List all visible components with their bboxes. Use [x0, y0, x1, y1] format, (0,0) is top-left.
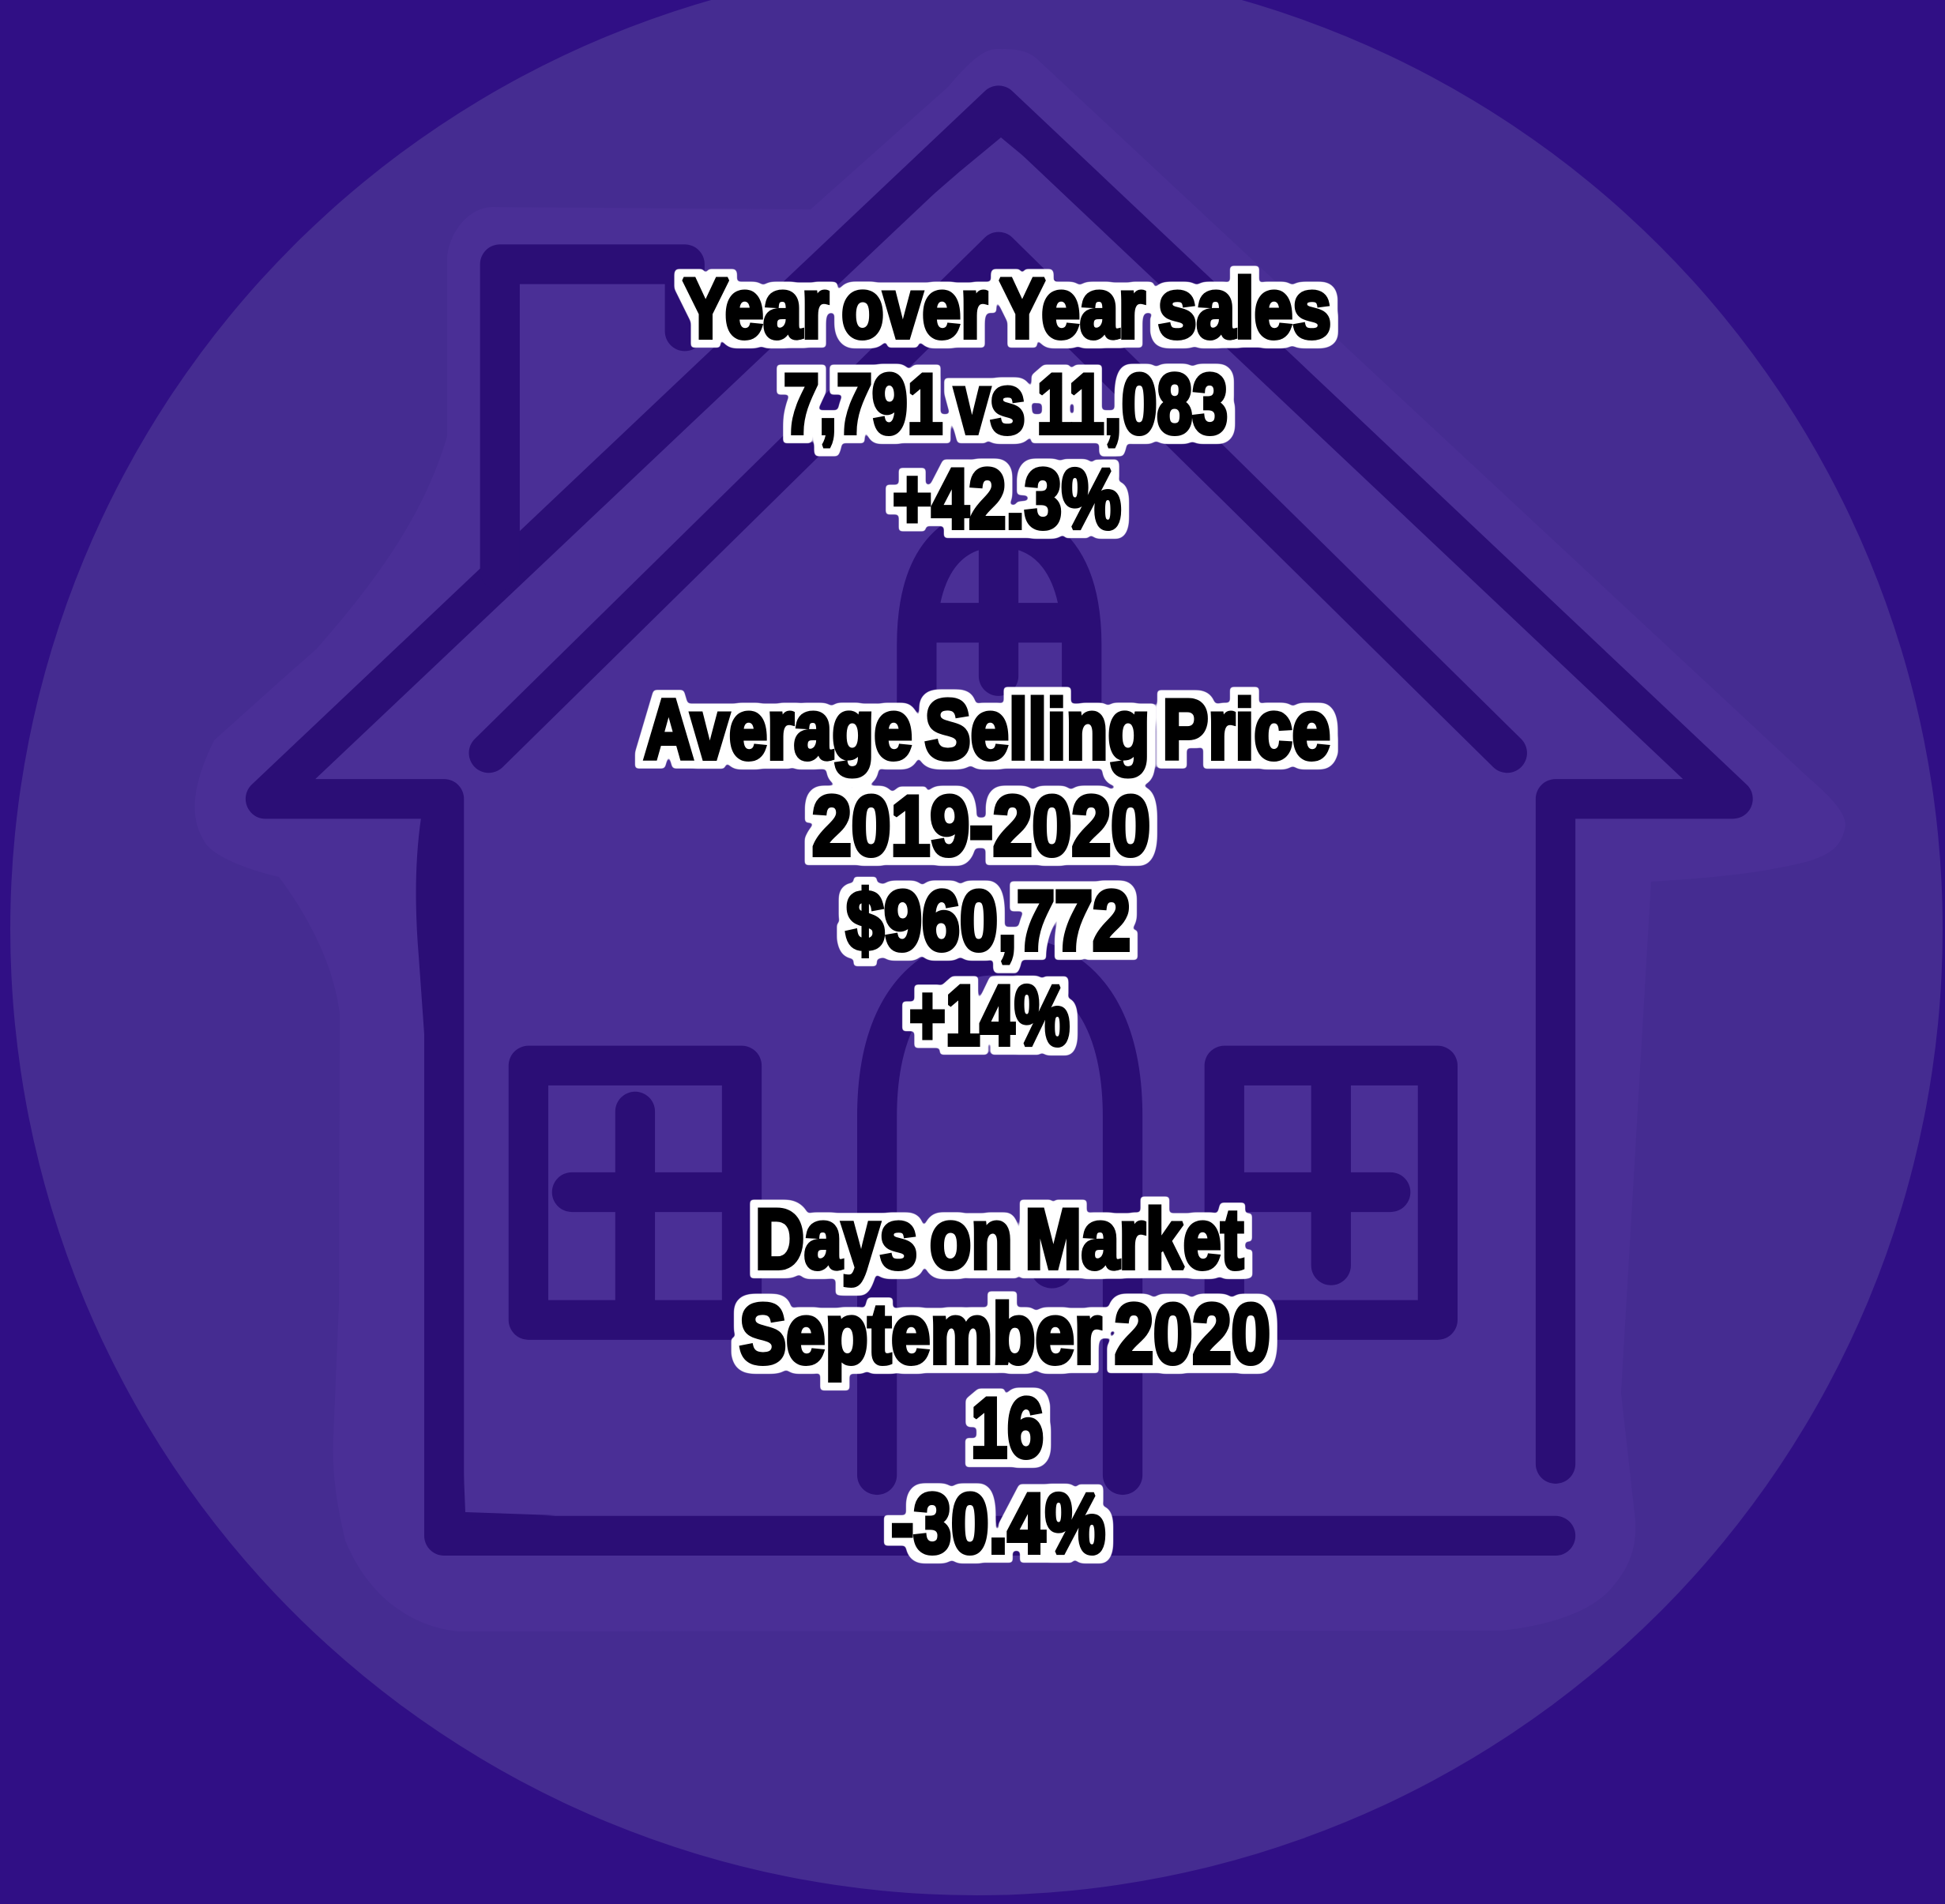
heading: Days on Market: [755, 1191, 1243, 1286]
attic window: [916, 527, 1082, 720]
right window: [1225, 1066, 1438, 1320]
days change: -30.4%: [891, 1476, 1105, 1571]
house icon: [265, 105, 1733, 1536]
left window: [529, 1066, 742, 1320]
wall and roof irregular edges: [416, 131, 1047, 1521]
heading: Year over Year sales: [683, 261, 1331, 356]
price change: +14%: [909, 968, 1070, 1063]
heading: Average Selling Price: [644, 682, 1330, 777]
price: $960,772: [846, 873, 1131, 968]
text block: days on market: [739, 1191, 1270, 1571]
house halo: [194, 49, 1845, 1631]
door: [877, 955, 1123, 1475]
door handle: [1038, 1228, 1066, 1266]
chimney: [500, 264, 685, 570]
outer roof and walls: [265, 105, 1733, 1536]
days: 16: [971, 1380, 1044, 1475]
inner roof: [489, 252, 1507, 753]
house line work: [265, 105, 1733, 1536]
sales change: +42.3%: [893, 451, 1121, 546]
period: September 2020: [739, 1286, 1270, 1381]
sales figures: 7,791 vs 11,083: [784, 356, 1228, 451]
text block: average selling price: [644, 682, 1330, 1063]
text block: year over year sales: [683, 261, 1331, 546]
period: 2019-2020: [812, 778, 1150, 873]
